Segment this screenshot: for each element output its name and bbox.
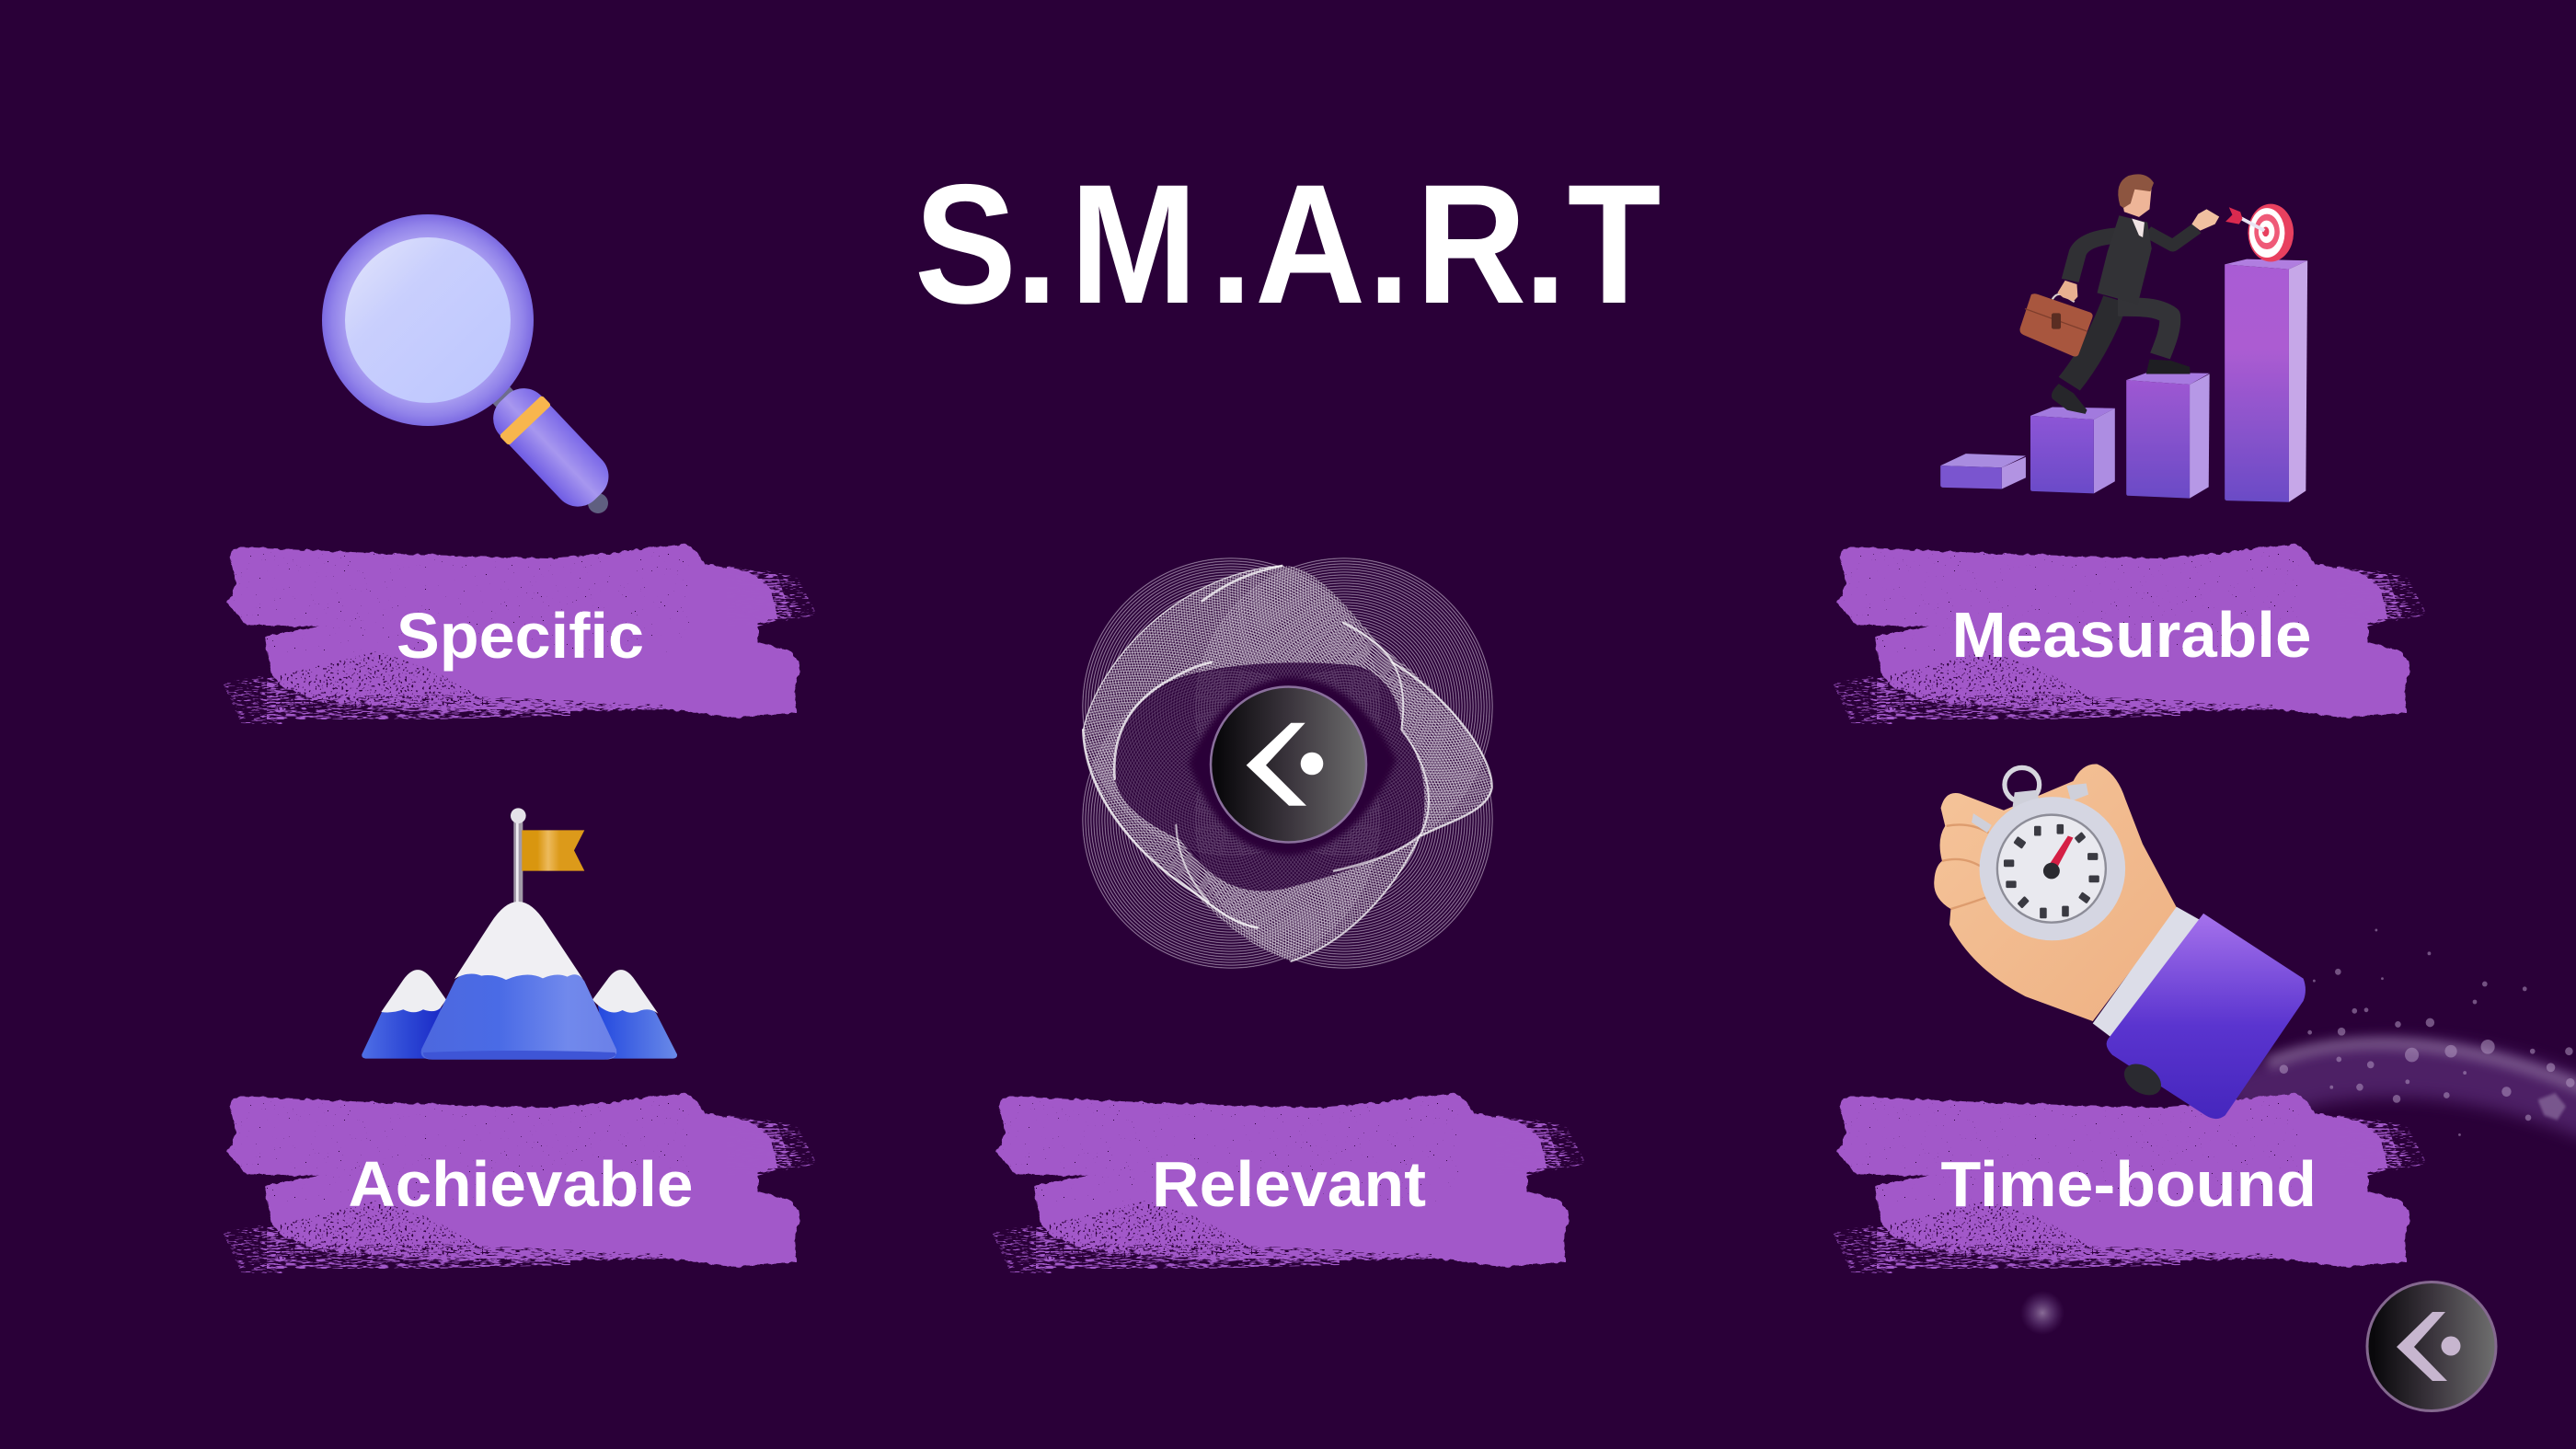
glowing dot xyxy=(2020,1291,2064,1335)
chevron xyxy=(1247,723,1306,806)
reaching hand xyxy=(2191,209,2219,231)
panel: Achievable xyxy=(223,1093,817,1274)
finger creases xyxy=(1942,824,1997,909)
ring xyxy=(2005,767,2040,801)
dial xyxy=(1997,815,2106,923)
dot xyxy=(1301,753,1323,775)
bright curves xyxy=(1083,566,1492,961)
briefcase xyxy=(2020,293,2093,357)
title: S.M.A.R.T xyxy=(914,150,1661,339)
target xyxy=(2225,204,2294,262)
left mountain xyxy=(362,970,446,1059)
watch case xyxy=(1980,797,2125,940)
flag xyxy=(522,830,584,871)
logo: bottom-right badge xyxy=(2367,1282,2496,1411)
cufflink xyxy=(2119,1058,2167,1101)
icon: hand with stopwatch xyxy=(1934,764,2306,1119)
badge dot xyxy=(2442,1336,2460,1356)
thumb and hand xyxy=(1934,764,2178,1021)
panel: Relevant: Relevant xyxy=(1152,1148,1426,1220)
hand on briefcase xyxy=(2057,281,2077,301)
rear arm xyxy=(2070,236,2118,281)
needle xyxy=(2048,836,2073,868)
jacket sleeve xyxy=(2107,914,2306,1119)
suit torso xyxy=(2098,215,2152,305)
back shoe xyxy=(2052,384,2087,414)
icon: magnifying glass xyxy=(322,214,619,517)
panel: Specific xyxy=(223,544,817,725)
eye-shaped hole xyxy=(1189,677,1397,856)
swirl emblem xyxy=(1082,558,1493,969)
logo: center disc xyxy=(1211,686,1366,843)
right mountain xyxy=(592,970,677,1059)
panel: Specific: Specific xyxy=(397,600,644,672)
crown xyxy=(1972,783,2088,833)
shirt and tie xyxy=(2132,219,2145,237)
panel: Time-bound: Time-bound xyxy=(1941,1148,2317,1220)
center snow xyxy=(454,902,584,982)
badge chevron xyxy=(2397,1312,2447,1381)
face xyxy=(2119,187,2152,217)
back leg xyxy=(2069,299,2116,384)
hair xyxy=(2118,174,2154,208)
panel: Relevant xyxy=(992,1093,1586,1274)
shirt cuff xyxy=(2093,907,2204,1041)
inner dim field xyxy=(1114,662,1424,891)
center mountain xyxy=(421,971,616,1060)
dial ticks xyxy=(2004,824,2099,918)
front leg xyxy=(2118,306,2170,356)
moire lobes xyxy=(1082,558,1493,969)
sparkle trail xyxy=(2234,929,2576,1136)
pole xyxy=(511,808,526,903)
front arm xyxy=(2147,228,2197,246)
lattice ribbon bands xyxy=(1083,566,1492,961)
panel: Measurable: Measurable xyxy=(1952,599,2311,671)
panel: Time-bound xyxy=(1833,1093,2427,1274)
icon: mountains with flag xyxy=(362,808,677,1060)
bars xyxy=(1940,259,2307,502)
panel: Achievable: Achievable xyxy=(348,1148,694,1220)
icon: businessman climbing bar chart xyxy=(1940,174,2307,502)
panel: Measurable xyxy=(1833,544,2427,725)
front shoe xyxy=(2146,360,2191,374)
